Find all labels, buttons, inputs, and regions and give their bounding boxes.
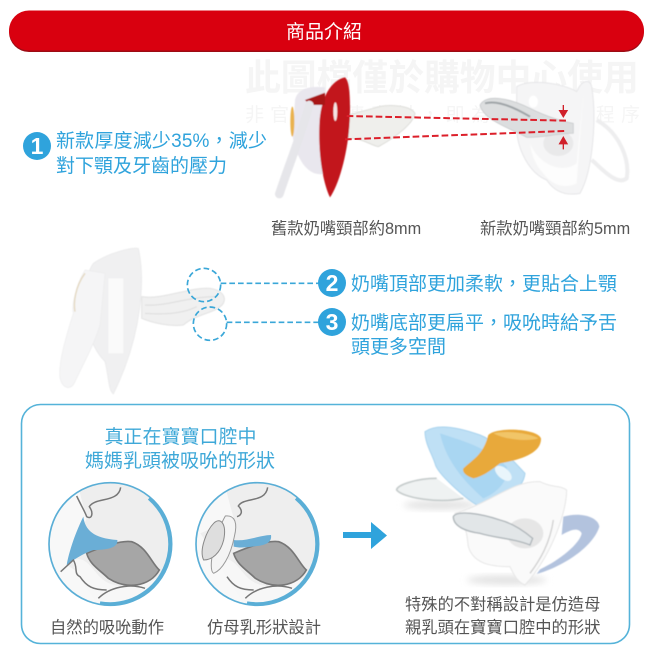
point 2: 奶嘴頂部更加柔軟，更貼合上顎: [351, 273, 617, 295]
panel heading: [85, 426, 275, 472]
point 3: [318, 308, 617, 358]
red dashed guide lines and arrows: [345, 105, 567, 149]
point 3: 3: [326, 309, 338, 335]
illustration: natural sucking: [47, 480, 173, 607]
caption: natural sucking: 自然的吸吮動作: [50, 619, 164, 637]
panel heading: 媽媽乳頭被吸吮的形狀: [85, 450, 275, 472]
side pacifier: [60, 248, 224, 394]
watermark: 非官方宣傳素材，即為違法使用程序: [245, 104, 640, 126]
watermark: [245, 58, 640, 126]
watermark: 此圖檔僅於購物中心使用: [245, 58, 639, 98]
caption: asymmetric design: 親乳頭在寶寶口腔中的形狀: [405, 618, 600, 637]
point 1: 對下顎及牙齒的壓力: [56, 155, 227, 177]
arrow: [343, 522, 387, 549]
old pacifier: red: [279, 77, 415, 197]
caption: pacifier design: 仿母乳形狀設計: [207, 619, 321, 637]
caption: asymmetric design: 特殊的不對稱設計是仿造母: [405, 596, 600, 614]
product photo: blue and white pacifiers: [397, 427, 599, 585]
point 3: 頭更多空間: [351, 336, 446, 358]
caption: new nipple: 新款奶嘴頸部約5mm: [480, 220, 630, 238]
caption: old nipple: 舊款奶嘴頸部約8mm: [271, 220, 421, 238]
point 2: [318, 269, 617, 297]
point 1: [23, 130, 267, 177]
panel heading: 真正在寶寶口腔中: [104, 426, 257, 448]
point 3: 奶嘴底部更扁平，吸吮時給予舌: [351, 312, 617, 334]
new pacifier: clear: [480, 81, 627, 194]
header bar: [9, 10, 644, 52]
point 1: 新款厚度減少35%，減少: [56, 130, 267, 152]
caption: asymmetric design: [405, 596, 600, 637]
illustration: pacifier in mouth: [194, 480, 320, 607]
panel: natural shape: [22, 404, 630, 644]
header bar: 商品介紹: [286, 21, 362, 43]
point 2: 2: [326, 270, 338, 296]
callout marker circles and dashed leaders: [187, 268, 319, 340]
point 1: 1: [31, 133, 44, 159]
